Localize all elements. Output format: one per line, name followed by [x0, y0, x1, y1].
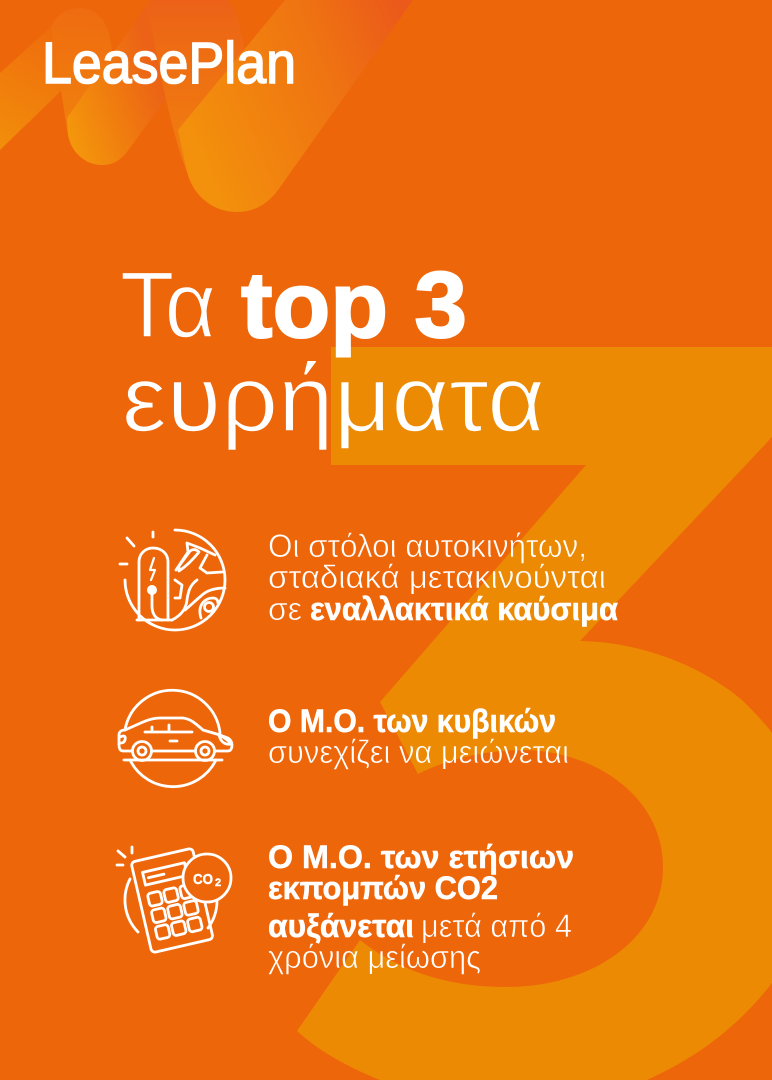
finding 1: alternative fuels [120, 528, 618, 630]
title [120, 252, 545, 451]
icon: car on circle [119, 690, 232, 787]
title line 1: Τα [120, 252, 216, 357]
icon label: CO2: 2 [215, 877, 221, 889]
large number 3 backdrop [297, 347, 772, 1080]
text: finding 3 [268, 839, 574, 975]
text: finding 1 [268, 528, 618, 627]
text: finding 3: αυξάνεται [268, 908, 414, 944]
text: finding 3: μετά από 4 [421, 908, 572, 944]
text: finding 2: Ο Μ.Ο. των κυβικών [268, 703, 556, 739]
icon label: CO2: CO [193, 871, 213, 888]
icon: calculator with CO2 badge [117, 847, 231, 953]
icon: EV charger and car [120, 530, 225, 630]
text: finding 1: εναλλακτικά καύσιμα [310, 591, 618, 627]
text: finding 1: σε [268, 591, 302, 627]
finding 3: CO2 emissions [117, 839, 574, 975]
text: finding 3: χρόνια μείωσης [268, 939, 481, 975]
title line 1: top 3 [241, 252, 467, 357]
text: finding 1: Οι στόλοι αυτοκινήτων, [268, 528, 587, 564]
text: finding 1: σταδιακά μετακινούνται [268, 559, 606, 595]
decorative ribbon shapes [0, 0, 413, 212]
title line 2: ευρήματα [122, 346, 545, 451]
text: finding 3: Ο Μ.Ο. των ετήσιων [268, 839, 574, 875]
text: finding 2 [268, 703, 569, 770]
finding 2: engine displacement [119, 690, 569, 787]
text: finding 3: εκπομπών CO2 [268, 870, 498, 906]
text: finding 2: συνεχίζει να μειώνεται [268, 734, 569, 770]
logo: LeasePlan [42, 31, 296, 96]
